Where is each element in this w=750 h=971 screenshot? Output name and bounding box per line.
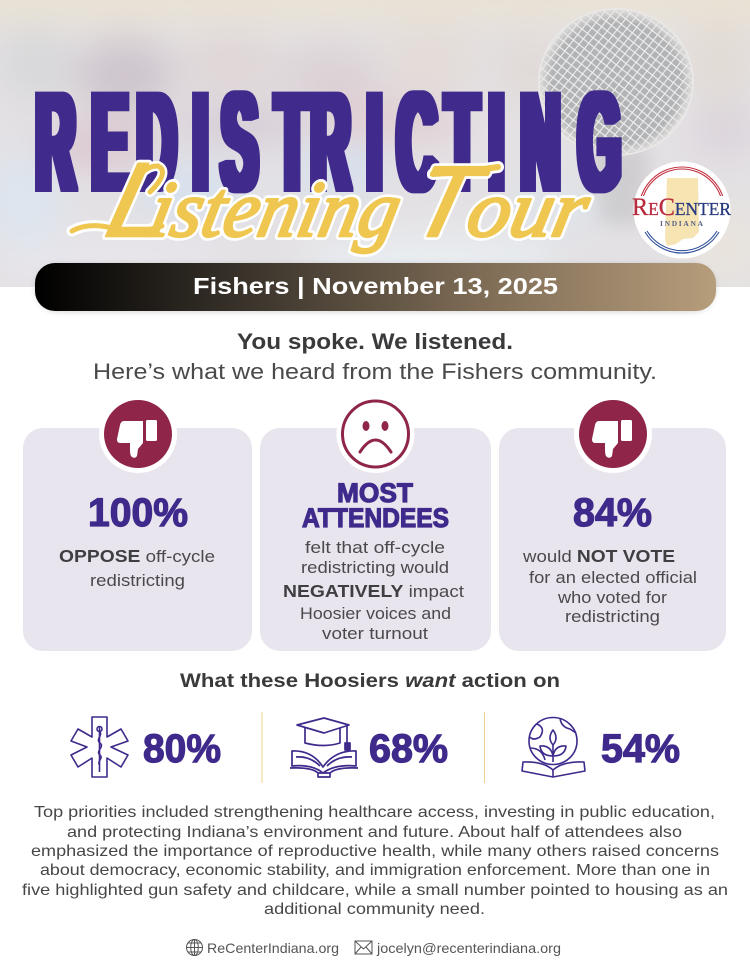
stat: 84%: 84%	[573, 491, 652, 535]
text: would not vote: would NOT VOTE	[522, 546, 675, 566]
divider	[262, 712, 263, 783]
logo: ReCenter Indiana: RECENTER	[632, 194, 731, 221]
microphone	[538, 8, 694, 228]
panel: 84% would not vote	[499, 395, 726, 651]
script outline: L	[97, 140, 185, 259]
text: negative impact: Hoosier voices and	[300, 604, 451, 623]
paragraph: top priorities: about democracy, economic stability, and immigration enforcement. More than one in	[40, 862, 710, 879]
paragraph: top priorities	[22, 804, 728, 918]
stat: most attendees: ATTENDEES	[302, 503, 449, 533]
stat: 100%: 100%	[88, 491, 188, 535]
value: 54%: 54%	[601, 727, 680, 771]
value: 68%: 68%	[369, 727, 448, 771]
text: oppose off-cycle redistricting: redistricting	[90, 571, 185, 590]
script fill: our	[460, 166, 597, 254]
hero photo background	[0, 0, 750, 287]
value: 80%: 80%	[143, 727, 221, 771]
logo: Indiana state shape	[665, 178, 699, 246]
panel: 100% oppose	[23, 395, 252, 651]
paragraph: top priorities: and protecting Indiana’s environment and future. About half of attendees also	[67, 824, 682, 841]
paragraph: top priorities: Top priorities included strengthening healthcare access, investing in public education,	[34, 804, 715, 821]
icon: thumbs down	[574, 395, 652, 473]
stat: most attendees	[302, 478, 449, 533]
logo: ReCenter Indiana	[632, 162, 731, 258]
icon: star of life	[71, 717, 128, 777]
text: negative impact	[283, 538, 464, 643]
stat: most attendees: MOST	[337, 478, 413, 508]
text: oppose off-cycle redistricting: OPPOSE off-cycle	[59, 546, 215, 566]
icon: globe, sprout and book	[522, 718, 585, 777]
intro heading: You spoke. We listened.	[237, 329, 513, 354]
script outline: T	[402, 145, 498, 258]
paragraph: top priorities: additional community need.	[264, 901, 485, 918]
paragraph: top priorities: five highlighted gun safety and childcare, while a small number pointed to housing as an	[22, 882, 728, 899]
text: negative impact: felt that off-cycle	[305, 538, 445, 557]
script fill: T	[402, 145, 498, 258]
icon: globe	[186, 940, 202, 956]
script fill: L	[97, 140, 185, 259]
icon: graduation cap and book	[290, 718, 358, 777]
stat: healthcare 80%	[71, 717, 221, 777]
text: oppose off-cycle redistricting	[59, 546, 215, 590]
panel: most attendees	[260, 395, 491, 651]
date banner: Fishers | November 13, 2025	[193, 273, 558, 299]
text: would not vote: redistricting	[565, 607, 660, 626]
icon: envelope	[355, 941, 372, 954]
footer: email: jocelyn@recenterindiana.org	[376, 940, 561, 956]
script outline	[72, 140, 597, 259]
text: negative impact: redistricting would	[301, 558, 449, 577]
stat: environment 54%	[522, 718, 680, 777]
intro subheading: Here’s what we heard from the Fishers community.	[93, 359, 657, 384]
logo: ReCenter Indiana: INDIANA	[660, 219, 704, 228]
script outline: istening	[142, 166, 409, 254]
paragraph: top priorities: emphasized the importance of reproductive health, while many others raised concerns	[31, 843, 719, 860]
icon: thumbs down	[99, 395, 177, 473]
footer: website: ReCenterIndiana.org	[207, 940, 339, 956]
section heading: action: What these Hoosiers want action on	[180, 671, 560, 692]
script fill: istening	[142, 166, 409, 254]
icon: sad face	[336, 395, 414, 473]
text: would not vote: who voted for	[557, 588, 667, 607]
date banner	[35, 263, 716, 312]
text: would not vote	[522, 546, 697, 626]
text: would not vote: for an elected official	[529, 568, 697, 587]
divider	[484, 712, 485, 783]
text: negative impact: NEGATIVELY impact	[283, 581, 464, 601]
title: REDISTRICTING: REDISTRICTING	[36, 63, 621, 220]
text: negative impact: voter turnout	[322, 624, 428, 643]
script outline: our	[460, 166, 597, 254]
title: Listening Tour script	[72, 140, 597, 259]
script fill	[72, 140, 597, 259]
stat: education 68%	[290, 718, 448, 777]
